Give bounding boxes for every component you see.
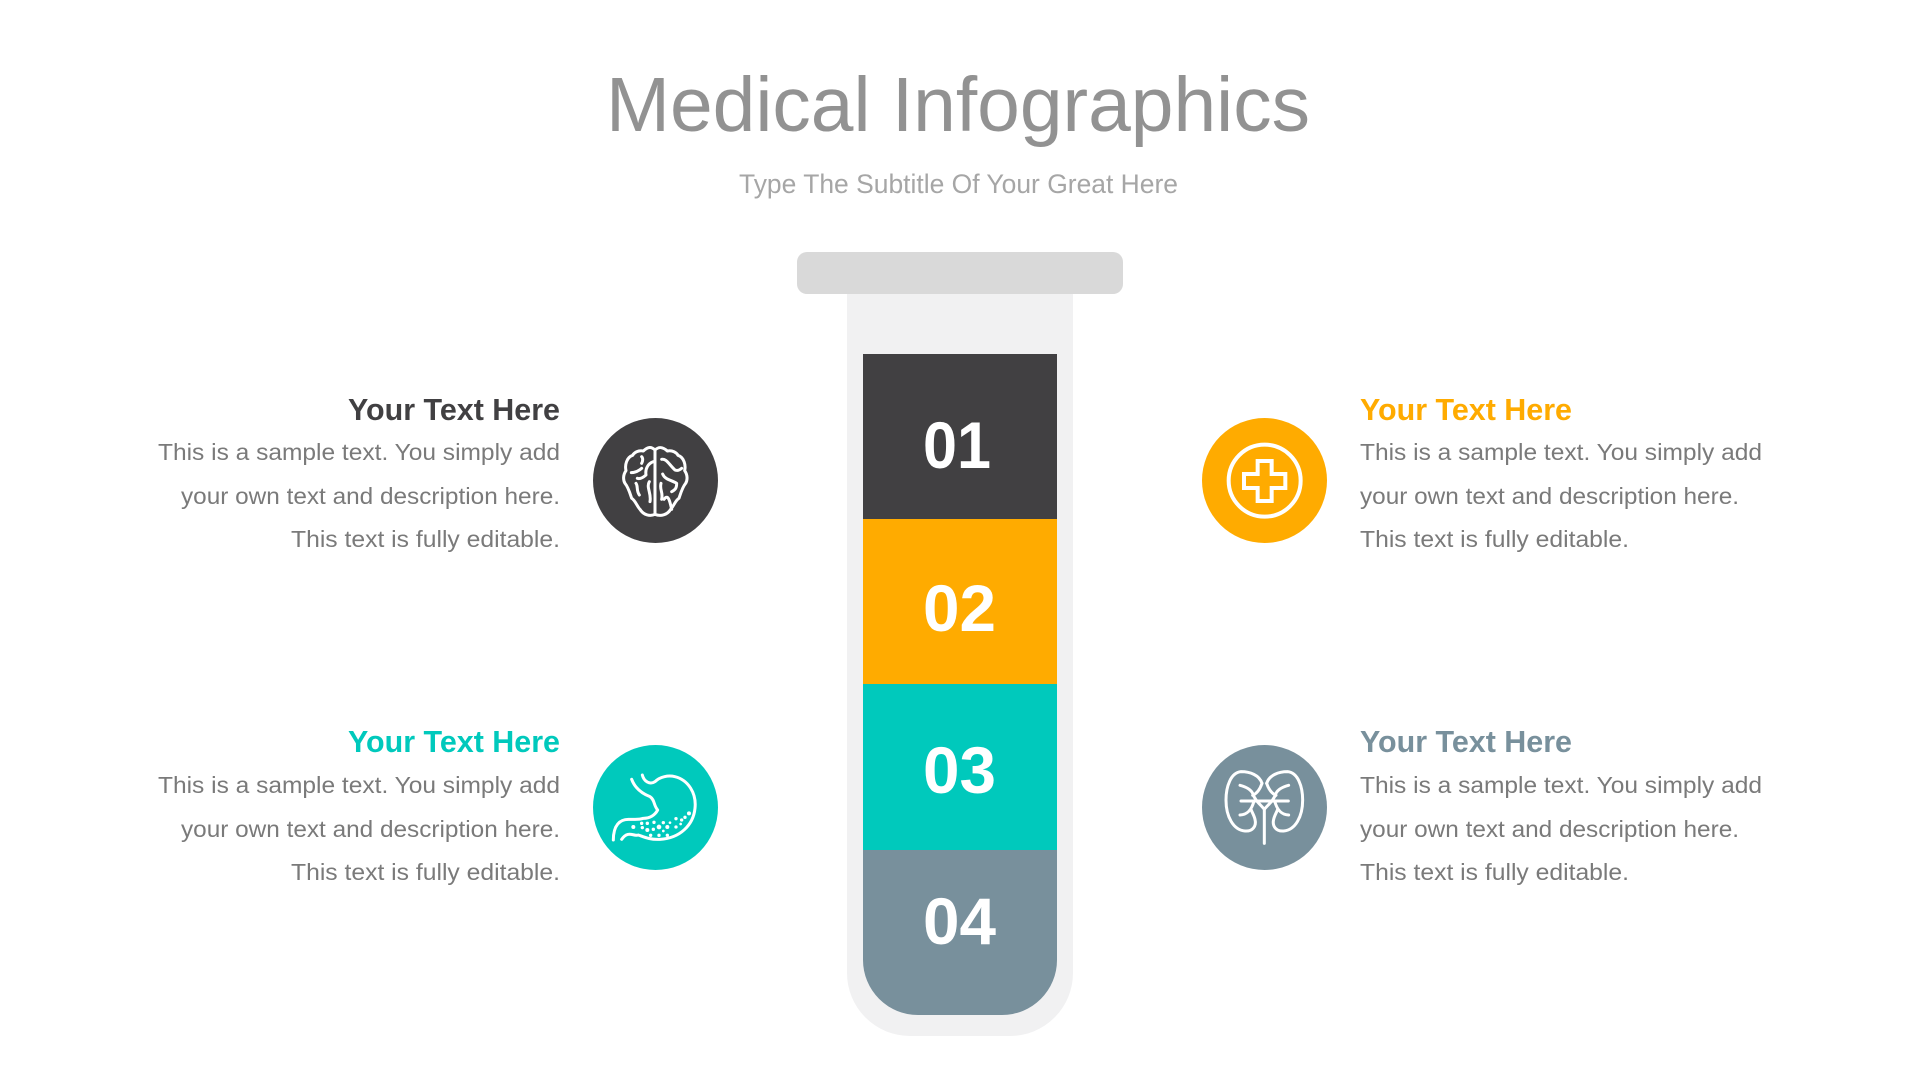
segment 02 <box>863 519 1057 684</box>
panel: item 3 text <box>158 724 560 885</box>
segment 01: 01 <box>923 408 991 482</box>
heading: Your Text Here <box>1360 724 1572 759</box>
body text: This is a sample text. You simply add <box>1360 439 1762 465</box>
segment 01 <box>863 354 1057 519</box>
body text: This is a sample text. You simply add <box>1360 772 1762 798</box>
body text: This text is fully editable. <box>1360 859 1629 885</box>
body text <box>158 439 560 552</box>
heading: Your Text Here <box>348 724 560 759</box>
panel: item 2 text <box>1360 392 1762 552</box>
heading: Your Text Here <box>348 392 560 427</box>
segment 02: 02 <box>923 571 996 645</box>
body text <box>158 772 560 885</box>
test tube graphic <box>797 252 1123 1036</box>
body text: your own text and description here. <box>1360 816 1739 842</box>
icon: brain <box>593 418 718 543</box>
icon: medical cross <box>1202 418 1327 543</box>
tube cap <box>797 252 1123 294</box>
panel: item 4 text <box>1360 724 1762 885</box>
heading: Your Text Here <box>1360 392 1572 427</box>
body text: This text is fully editable. <box>1360 526 1629 552</box>
segment 04 <box>863 850 1057 1015</box>
body text: This is a sample text. You simply add <box>158 772 560 798</box>
segment 03: 03 <box>923 733 996 807</box>
icon: stomach <box>593 745 718 870</box>
title: Medical Infographics <box>606 62 1310 148</box>
body text: your own text and description here. <box>181 483 560 509</box>
body text: This text is fully editable. <box>291 859 560 885</box>
body text: This is a sample text. You simply add <box>158 439 560 465</box>
icon: kidneys <box>1202 745 1327 870</box>
body text: This text is fully editable. <box>291 526 560 552</box>
subtitle: Type The Subtitle Of Your Great Here <box>739 169 1178 199</box>
body text <box>1360 439 1762 552</box>
tube body <box>847 294 1073 1036</box>
body text: your own text and description here. <box>1360 483 1739 509</box>
panel: item 1 text <box>158 392 560 552</box>
body text <box>1360 772 1762 885</box>
segment 03 <box>863 684 1057 850</box>
segment 04: 04 <box>923 884 996 958</box>
body text: your own text and description here. <box>181 816 560 842</box>
